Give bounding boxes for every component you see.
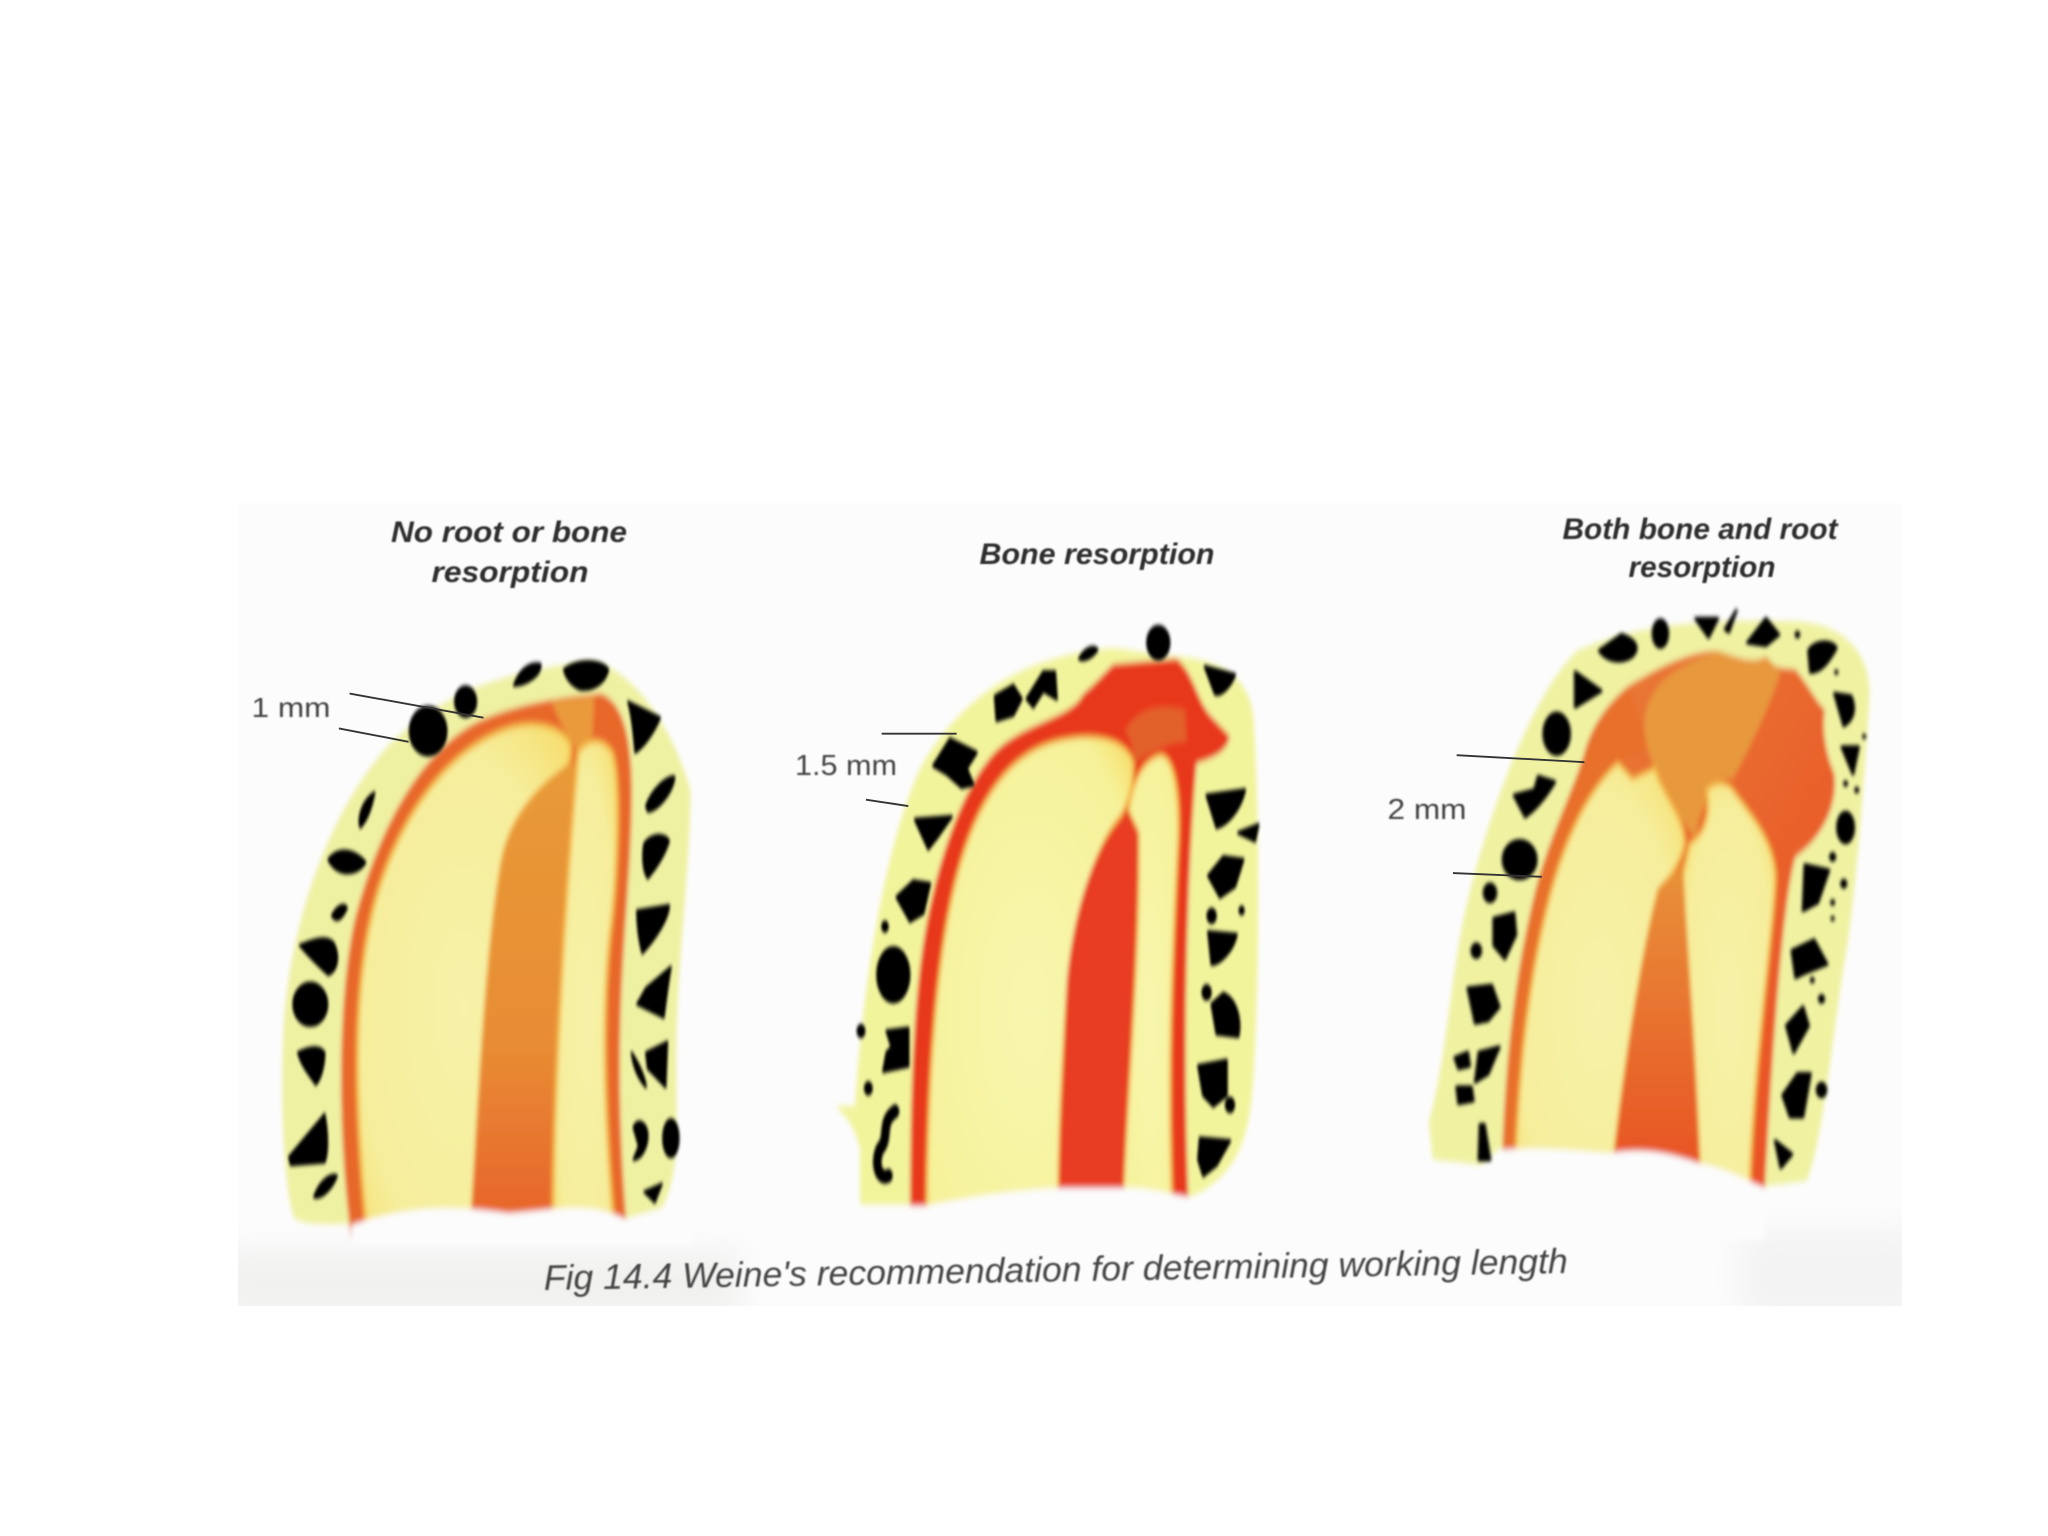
tooth diagram: bone resorption: [835, 627, 1258, 1240]
dentin left: [1514, 763, 1684, 1202]
root outline: [341, 694, 632, 1240]
measurement label 1.5 mm: 1.5 mm: [795, 750, 897, 782]
1 mm leader lines: [339, 694, 483, 742]
infographic canvas: [238, 516, 1902, 1306]
bone trabeculae: [1455, 611, 1865, 1168]
heading: bone resorption: Bone resorption: [980, 538, 1214, 571]
bone trabeculae: [289, 661, 679, 1202]
pulp canal: [470, 763, 575, 1237]
bone: [1429, 621, 1870, 1186]
pulp canal: [1609, 865, 1701, 1202]
root outline with lesion: [1501, 651, 1835, 1202]
apical patch: [1644, 651, 1781, 838]
lower edge: [351, 1208, 694, 1245]
panel background: [238, 503, 1902, 1306]
heading line two: resorption: [1628, 551, 1776, 584]
lower edge: [1499, 1149, 1765, 1240]
dentin right: [1683, 784, 1775, 1202]
dentin left: [927, 737, 1133, 1235]
heading: both bone and root resorption: Both bone and root: [1562, 513, 1839, 546]
apical patch: [551, 696, 594, 752]
measurement label 1 mm: 1 mm: [252, 692, 330, 723]
heading line two: resorption: [432, 556, 588, 589]
bone: [282, 661, 691, 1224]
figure panel: [220, 503, 1920, 1320]
pulp canal: [1058, 811, 1138, 1235]
root outline with lesion: [910, 659, 1230, 1235]
dentin right: [553, 741, 617, 1237]
tooth diagram: no resorption: [282, 661, 694, 1245]
apical patch: [1125, 707, 1187, 763]
measurement label 2 mm: 2 mm: [1388, 794, 1466, 826]
lower edge: [860, 1188, 1191, 1240]
heading: no root or bone resorption: No root or bone: [391, 516, 627, 549]
bone trabeculae: [858, 627, 1258, 1177]
figure caption: Fig 14.4 Weine's recommendation for determining working length: [543, 1242, 1568, 1298]
2 mm leader lines: [1453, 755, 1584, 877]
tooth diagram: bone and root resorption: [1429, 611, 1870, 1240]
left root band: [1501, 686, 1647, 1202]
1.5 mm leader lines: [866, 734, 957, 806]
dentin right: [1122, 755, 1179, 1235]
bone: [835, 648, 1258, 1205]
dentin left: [357, 725, 571, 1237]
